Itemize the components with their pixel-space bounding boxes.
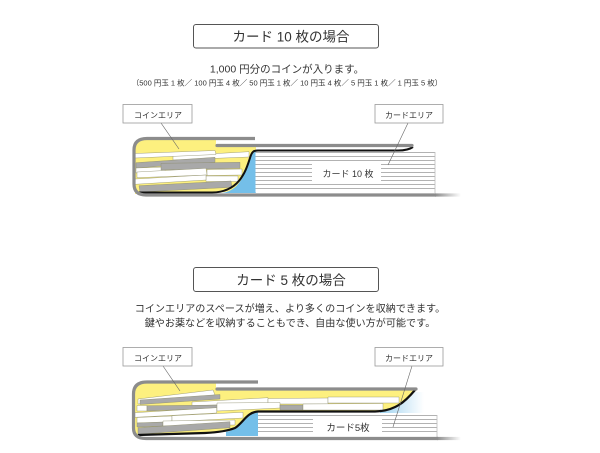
coins bbox=[135, 390, 399, 434]
text block: 10 cards capacity: （500 円玉 1 枚／ 100 円玉 4 枚／ 50 円玉 1 枚／ 10 円玉 4 枚／ 5 円玉 1 枚／ 1 円玉 5 枚） bbox=[132, 78, 442, 88]
flap bbox=[217, 144, 412, 147]
outer shell bbox=[134, 138, 436, 195]
callout: coin area bbox=[123, 348, 192, 391]
heading: 10 cards: カード 10 枚の場合 bbox=[232, 30, 350, 44]
text block: 10 cards capacity bbox=[132, 62, 442, 88]
stack of cards bbox=[258, 415, 437, 437]
diagram: wallet with 10 cards bbox=[134, 138, 461, 197]
text block: 10 cards capacity: 1,000 円分のコインが入ります。 bbox=[210, 62, 364, 76]
text block: 5 cards description bbox=[135, 302, 445, 330]
heading: 5 cards bbox=[194, 268, 378, 292]
callout: card area: カードエリア bbox=[385, 111, 433, 120]
heading: 5 cards: カード 5 枚の場合 bbox=[236, 273, 346, 288]
blue glow bbox=[380, 392, 424, 413]
text block: 5 cards description: コインエリアのスペースが増え、より多くのコインを収納できます。 bbox=[135, 302, 445, 315]
callout: card area bbox=[375, 104, 443, 165]
callout: card area: カードエリア bbox=[385, 354, 433, 363]
stack of cards bbox=[256, 152, 436, 193]
yellow coin area bbox=[135, 383, 415, 436]
black inner lining bbox=[138, 390, 415, 435]
black inner lining bbox=[139, 147, 413, 192]
heading: 10 cards bbox=[194, 24, 378, 48]
diagram: wallet with 5 cards bbox=[134, 382, 461, 440]
callout: coin area: コインエリア bbox=[134, 354, 182, 363]
blue gap bbox=[226, 412, 258, 436]
text block: 5 cards description: 鍵やお薬などを収納することもでき、自由な使い方が可能です。 bbox=[145, 316, 435, 330]
callout: coin area: コインエリア bbox=[134, 111, 182, 120]
coins bbox=[135, 150, 249, 192]
outer shell bbox=[134, 382, 438, 438]
stack of cards: カード5枚 bbox=[326, 422, 370, 434]
flap bbox=[217, 387, 416, 391]
stack of cards: カード 10 枚 bbox=[322, 168, 374, 179]
callout: card area bbox=[375, 348, 443, 427]
callout: coin area bbox=[123, 104, 192, 149]
yellow coin area bbox=[135, 139, 256, 194]
blue gap bbox=[222, 151, 256, 193]
